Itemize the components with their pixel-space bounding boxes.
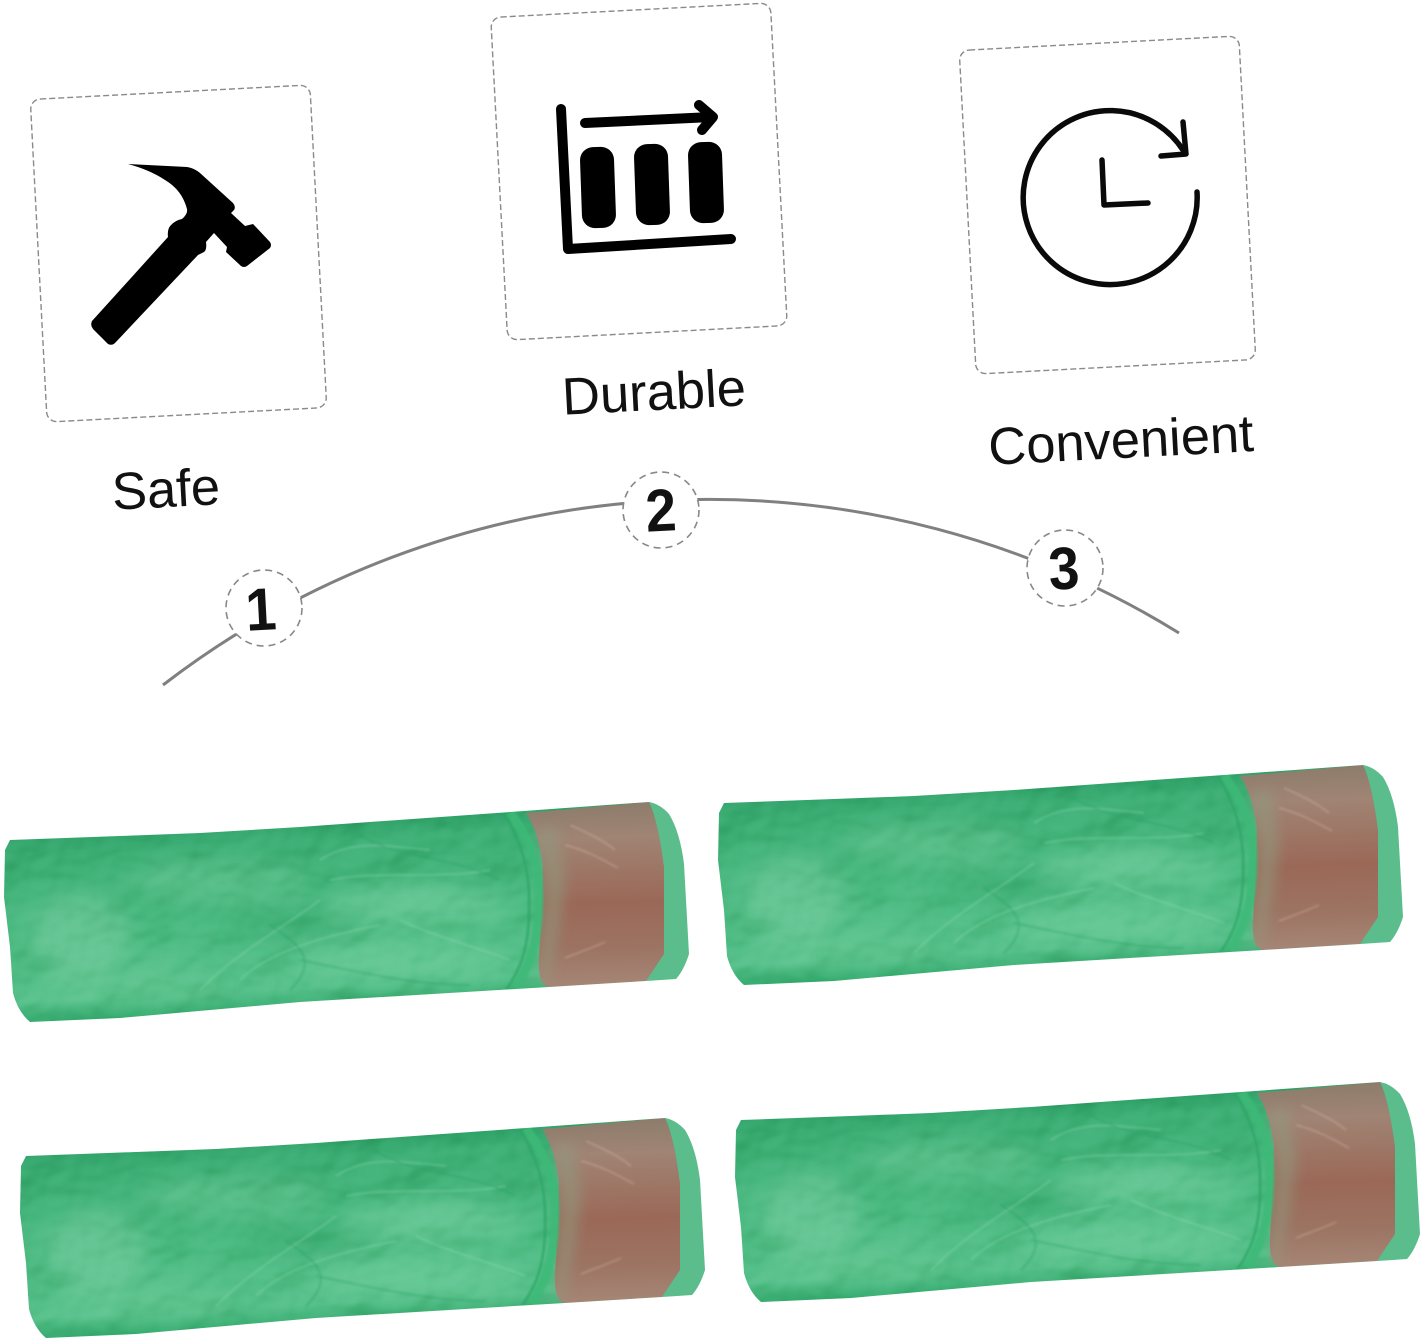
safe label: Safe bbox=[110, 457, 221, 522]
step 1 bbox=[226, 570, 302, 646]
safe card border bbox=[30, 85, 327, 422]
step 3: 3 bbox=[1047, 535, 1081, 603]
durable label: Durable bbox=[561, 358, 747, 427]
step 2: 2 bbox=[644, 477, 678, 545]
green roll bottom right bbox=[731, 1075, 1424, 1310]
durable card border bbox=[491, 3, 787, 340]
panel: convenient bbox=[959, 36, 1256, 477]
step 3 bbox=[1027, 530, 1103, 606]
panel: safe bbox=[30, 85, 327, 522]
step 1: 1 bbox=[244, 576, 278, 644]
timeline arc with numbered steps bbox=[163, 472, 1179, 685]
green roll top right bbox=[714, 758, 1414, 993]
panel: durable bbox=[491, 3, 787, 427]
step 2 bbox=[623, 472, 699, 548]
icon: bar chart with arrow bbox=[561, 105, 731, 249]
convenient label: Convenient bbox=[987, 404, 1255, 477]
green roll top left bbox=[0, 795, 700, 1030]
icon: clock with arrow bbox=[1023, 111, 1197, 285]
icon: hammer bbox=[91, 164, 271, 345]
green roll bottom left bbox=[16, 1111, 716, 1342]
convenient card border bbox=[959, 36, 1256, 374]
